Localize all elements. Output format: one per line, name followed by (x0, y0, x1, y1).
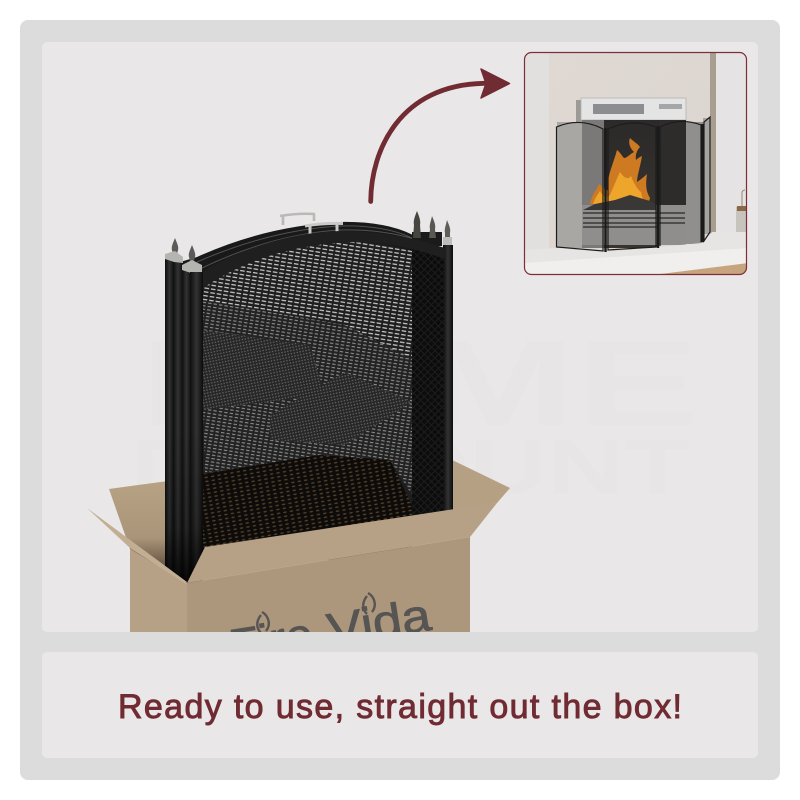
box: cardboard (88, 503, 497, 632)
wall (526, 54, 549, 250)
hearth (549, 232, 716, 252)
grate bars (583, 213, 685, 227)
panel: product image area (42, 42, 758, 672)
logo on box (230, 592, 434, 632)
chimney shadow edge (710, 52, 716, 247)
logs (583, 195, 656, 210)
left side face (130, 549, 187, 640)
front face (187, 537, 470, 640)
handle: front (305, 223, 343, 235)
caption text: Ready to use, straight out the box! (118, 688, 682, 726)
front arch and left post (190, 231, 445, 590)
right wall (716, 52, 748, 247)
watermark: DISCOUNT (130, 425, 690, 510)
finials: left (165, 238, 202, 273)
right posts (443, 245, 453, 515)
arrow (371, 69, 510, 202)
icon: flame on F (257, 612, 269, 633)
candle holder (736, 190, 746, 232)
front flap (187, 503, 497, 583)
logo on box: Vida (323, 588, 435, 656)
inset photo: installed fire screen (524, 52, 748, 276)
handle: rear (280, 214, 315, 225)
left posts (165, 258, 191, 590)
caption panel (42, 652, 758, 758)
left flap (87, 508, 187, 584)
marble chimney (549, 52, 711, 252)
logo on box: Fire (225, 607, 317, 672)
finials: right (412, 211, 452, 246)
box: back flaps (109, 458, 510, 575)
wood floor (662, 263, 746, 274)
watermark: HOME (140, 315, 700, 451)
inset border (524, 52, 746, 274)
icon: flame over i (363, 593, 375, 614)
flames (590, 138, 650, 205)
screen frames (556, 117, 710, 251)
heater vent (576, 98, 686, 122)
watermark (130, 315, 700, 510)
fire screen folded (165, 211, 453, 590)
mesh: front panel (200, 240, 415, 560)
side mesh: rear panels (410, 249, 444, 519)
back panels arches (183, 222, 412, 272)
firebox (557, 118, 711, 248)
